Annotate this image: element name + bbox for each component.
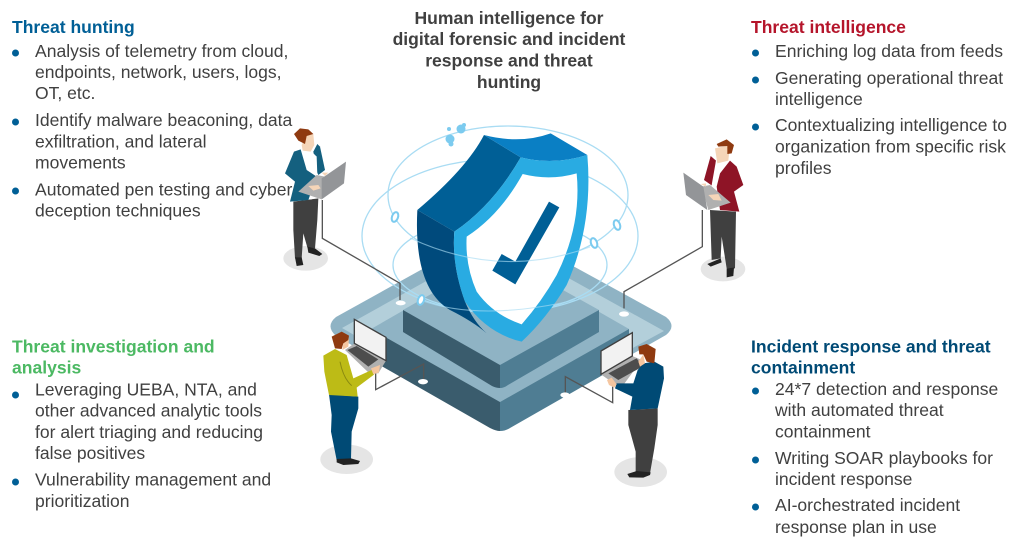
panel: threat hunting xyxy=(12,17,293,220)
panel: threat investigation and analysis: other advanced analytic tools xyxy=(35,400,262,420)
panel: threat intelligence: Threat intelligence xyxy=(751,17,906,37)
panel: threat hunting: Identify malware beaconing, data xyxy=(35,110,293,130)
panel: threat intelligence: organization from specific risk xyxy=(775,136,1006,156)
panel: incident response and threat containment: 24*7 detection and response xyxy=(775,379,998,399)
icon: check mark xyxy=(492,202,559,284)
isometric platform xyxy=(330,226,672,431)
title: hunting xyxy=(477,72,541,92)
icon: shield xyxy=(417,133,588,342)
shield left side xyxy=(417,210,487,333)
panel: threat hunting: movements xyxy=(35,152,126,172)
panel: threat hunting: endpoints, network, users, logs, xyxy=(35,62,282,82)
person: top left analyst with laptop xyxy=(283,128,406,305)
panel: threat intelligence: intelligence xyxy=(775,89,863,109)
panel: incident response and threat containment: AI-orchestrated incident xyxy=(775,495,960,515)
panel: incident response and threat containment: response plan in use xyxy=(775,517,937,537)
panel: incident response and threat containment: incident response xyxy=(775,469,912,489)
shield top left face xyxy=(417,135,521,232)
orbit nodes and data bubbles xyxy=(390,123,622,306)
panel: threat investigation and analysis: prioritization xyxy=(35,491,130,511)
panel: threat intelligence: profiles xyxy=(775,158,832,178)
title: digital forensic and incident xyxy=(393,29,626,49)
panel: threat hunting: exfiltration, and lateral xyxy=(35,132,207,152)
title: response and threat xyxy=(425,50,593,70)
panel: threat investigation and analysis: Vulnerability management and xyxy=(35,470,271,490)
shield white face xyxy=(466,173,577,324)
panel: threat hunting: Analysis of telemetry from cloud, xyxy=(35,41,288,61)
panel: threat hunting: Automated pen testing and cyber xyxy=(35,180,292,200)
panel: threat intelligence: Generating operational threat xyxy=(775,68,1003,88)
person: bottom left analyst with laptop xyxy=(320,319,428,474)
panel: incident response and threat containment: Writing SOAR playbooks for xyxy=(775,448,993,468)
orbit lines in front of shield xyxy=(410,238,590,311)
panel: incident response and threat containment: with automated threat xyxy=(774,400,944,420)
panel: threat hunting: OT, etc. xyxy=(35,83,95,103)
person: bottom right analyst with laptop xyxy=(560,333,667,487)
panel: incident response and threat containment: containment xyxy=(775,422,871,442)
panel: threat hunting: Threat hunting xyxy=(12,17,135,37)
person: top right analyst with laptop xyxy=(619,139,745,317)
shield top right face xyxy=(484,133,587,161)
panel: incident response and threat containment: Incident response and threat xyxy=(751,336,991,356)
title: Human intelligence for xyxy=(415,8,604,28)
panel: threat investigation and analysis: for alert triaging and reducing xyxy=(35,422,263,442)
panel: threat investigation and analysis: Leveraging UEBA, NTA, and xyxy=(35,380,257,400)
panel: threat hunting: deception techniques xyxy=(35,200,201,220)
panel: threat investigation and analysis: analysis xyxy=(12,358,81,378)
panel: threat intelligence xyxy=(751,17,1007,178)
panel: incident response and threat containment: containment xyxy=(751,358,855,378)
title xyxy=(393,8,626,92)
panel: incident response and threat containment xyxy=(751,336,998,537)
orbit rings behind shield xyxy=(362,126,638,313)
panel: threat intelligence: Contextualizing intelligence to xyxy=(775,115,1007,135)
panel: threat investigation and analysis xyxy=(12,336,271,511)
shield front rim xyxy=(454,155,588,342)
panel: threat investigation and analysis: Threat investigation and xyxy=(12,336,215,356)
panel: threat investigation and analysis: false positives xyxy=(35,443,145,463)
panel: threat intelligence: Enriching log data from feeds xyxy=(775,41,1003,61)
